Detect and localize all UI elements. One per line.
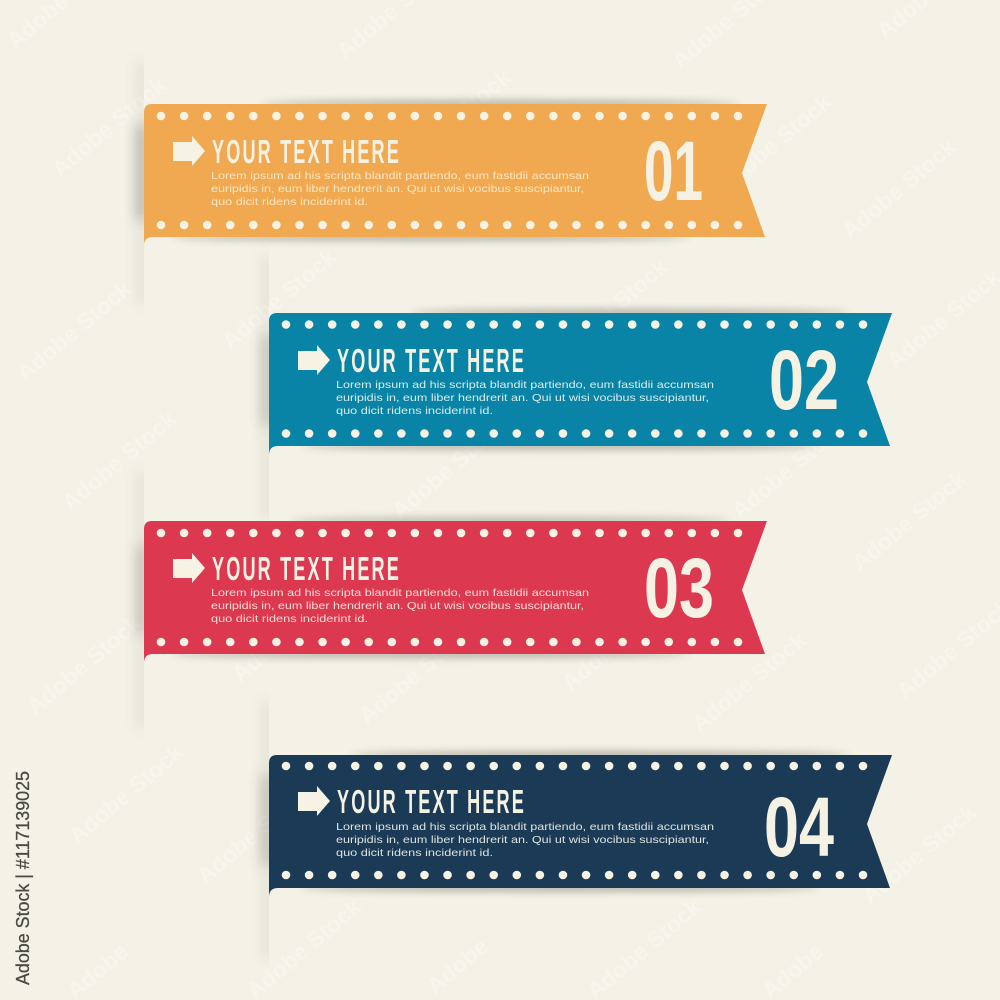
watermark pattern: Adobe Stock [387, 413, 511, 524]
ribbon 4 shape [269, 755, 892, 897]
ribbon 1 body text: euripidis in, eum liber hendrerit an. Qui ut wisi vocibus suscipiantur, [211, 184, 584, 195]
ribbon 2 body text: quo dicit ridens inciderint id. [336, 406, 493, 417]
ribbon 3: red [139, 470, 767, 730]
ribbon 1 heading: YOUR TEXT HERE [212, 134, 401, 171]
watermark pattern: Adobe Stock [12, 275, 136, 386]
ribbon 3 body text: quo dicit ridens inciderint id. [211, 614, 368, 625]
ribbon 2: teal [264, 255, 892, 520]
icon: arrow [173, 553, 205, 583]
ribbon 1: orange [139, 60, 767, 305]
ribbon 4 number: 04 [764, 780, 834, 874]
ribbon 1 number: 01 [644, 124, 703, 218]
ribbon 3 shape [144, 521, 767, 663]
ribbon 4 body text: quo dicit ridens inciderint id. [336, 848, 493, 859]
ribbon 2 shape [269, 313, 892, 455]
ribbon 4 dots [286, 766, 864, 875]
watermark pattern: Adobe Stock [22, 609, 146, 720]
ribbon 1 dots [161, 116, 739, 225]
ribbon 4: navy [264, 700, 892, 960]
ribbon 3 body text: euripidis in, eum liber hendrerit an. Qui ut wisi vocibus suscipiantur, [211, 601, 584, 612]
ribbon 4 shadow [264, 700, 850, 960]
watermark pattern: Adobe Stock [217, 243, 341, 354]
ribbon 1 shape [144, 104, 767, 246]
watermark pattern: Adobe Stock [857, 798, 981, 909]
stock id caption: Adobe Stock | #117139025 [12, 771, 33, 985]
ribbon 2 body text: euripidis in, eum liber hendrerit an. Qui ut wisi vocibus suscipiantur, [336, 393, 709, 404]
watermark pattern: Adobe [422, 933, 493, 999]
ribbon 4 heading: YOUR TEXT HERE [337, 784, 526, 821]
ribbon 1 shadow [139, 60, 740, 305]
ribbon 3 body text: Lorem ipsum ad his scripta blandit partiendo, eum fastidii accumsan [211, 588, 589, 599]
watermark pattern: Adobe Stock [837, 133, 961, 244]
watermark pattern: Adobe Stock [712, 88, 836, 199]
watermark pattern: Adobe Stock [727, 413, 851, 524]
watermark pattern: Adobe Stock [192, 778, 316, 889]
ribbon 3 shadow [139, 470, 730, 730]
watermark pattern: Adobe Stock [47, 71, 171, 182]
ribbon 2 dots [286, 324, 864, 434]
ribbon 2 body text: Lorem ipsum ad his scripta blandit partiendo, eum fastidii accumsan [336, 380, 714, 391]
ribbon 2 number: 02 [769, 333, 839, 427]
ribbon 2 shadow [264, 255, 850, 520]
watermark pattern: Adobe Stock [847, 465, 971, 576]
watermark pattern: Adobe Stock [64, 738, 188, 849]
watermark pattern: Adobe Stock [527, 783, 651, 894]
ribbon 1 body text: Lorem ipsum ad his scripta blandit partiendo, eum fastidii accumsan [211, 171, 589, 182]
ribbon 3 dots [161, 533, 739, 642]
icon: arrow [173, 136, 205, 166]
ribbon 3 heading: YOUR TEXT HERE [212, 551, 401, 588]
icon: arrow [298, 786, 330, 816]
ribbon 1 body text: quo dicit ridens inciderint id. [211, 197, 368, 208]
watermark pattern: Adobe Stock [557, 585, 681, 696]
watermark pattern: Adobe Stock [687, 626, 811, 737]
watermark pattern: Adobe Stock [392, 63, 516, 174]
ribbon 2 heading: YOUR TEXT HERE [337, 343, 526, 380]
ribbon 4 body text: Lorem ipsum ad his scripta blandit partiendo, eum fastidii accumsan [336, 822, 714, 833]
ribbon 4 body text: euripidis in, eum liber hendrerit an. Qui ut wisi vocibus suscipiantur, [336, 835, 709, 846]
watermark pattern: Adobe Stock [57, 405, 181, 516]
watermark pattern: Adobe Stock [227, 576, 351, 687]
watermark pattern: Adobe Stock [549, 253, 673, 364]
watermark pattern: Adobe Stock [354, 618, 478, 729]
icon: arrow [298, 345, 330, 375]
ribbon 3 number: 03 [644, 541, 714, 635]
